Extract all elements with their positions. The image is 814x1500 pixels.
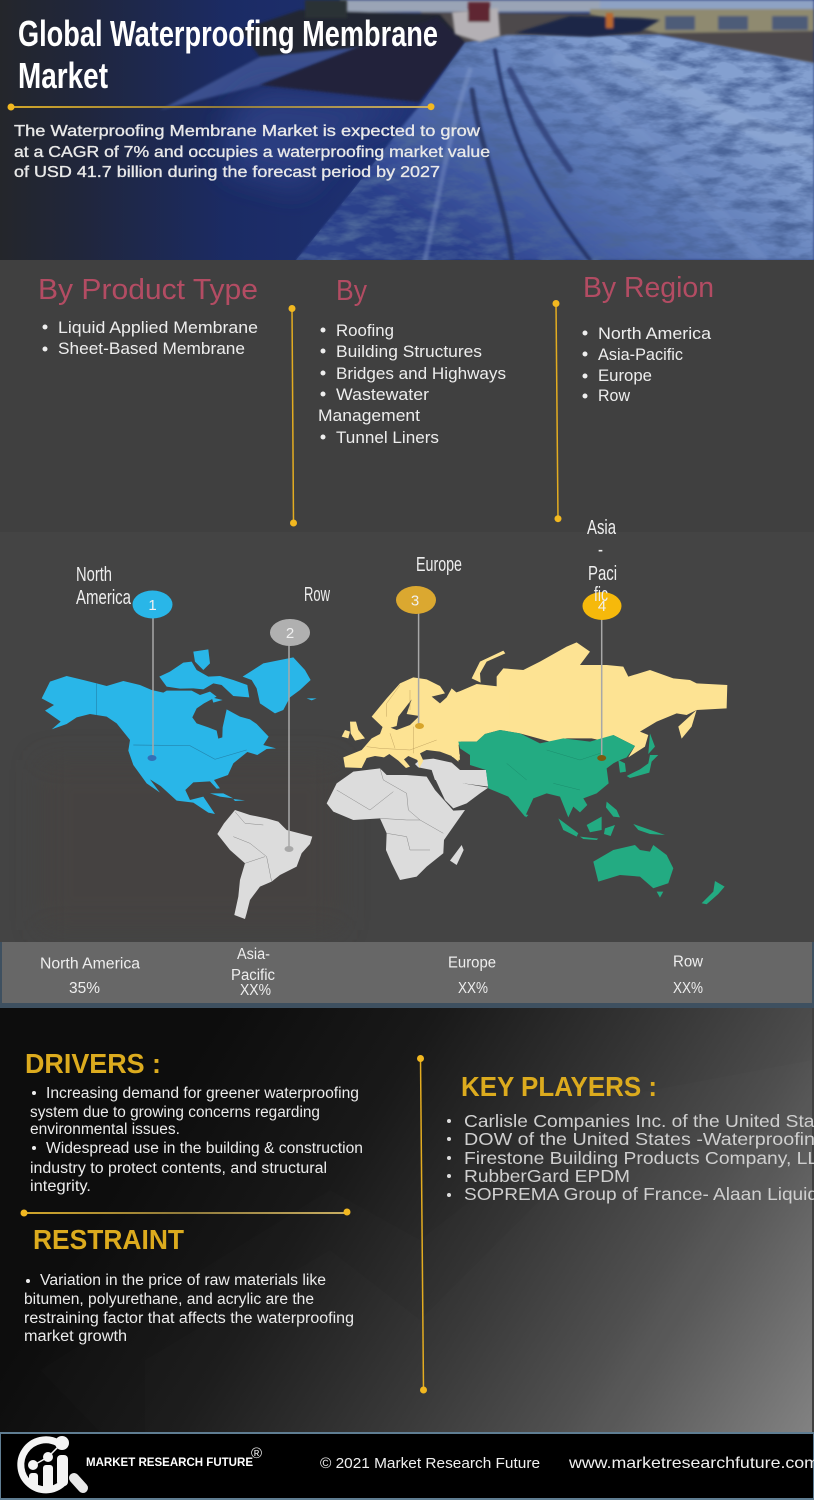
- list: applications: [318, 322, 506, 447]
- heading: key players: KEY PLAYERS :: [461, 1071, 657, 1102]
- title divider: [8, 103, 434, 110]
- heading: drivers: DRIVERS :: [25, 1048, 161, 1079]
- text: drivers list: Increasing demand for greener waterproofing: [46, 1085, 359, 1102]
- panel: footer: [0, 1432, 814, 1500]
- map: us border: [97, 683, 247, 759]
- list: applications: Building Structures: [336, 343, 482, 361]
- text: brand name: [86, 1445, 262, 1469]
- map: north america: [42, 649, 317, 814]
- heading: by region: By Region: [583, 272, 714, 304]
- text: restraint: Variation in the price of raw materials like: [40, 1272, 326, 1289]
- divider: drivers and restraint: [20, 1208, 350, 1216]
- photo: sky and building: [240, 0, 814, 65]
- intro text: [14, 123, 490, 181]
- pin 2: row: 2: [286, 625, 294, 642]
- photo: membrane sheet: [296, 35, 814, 260]
- list: regions: Asia-Pacific: [598, 346, 683, 364]
- text: restraint: [24, 1272, 354, 1345]
- text: brand name: MARKET RESEARCH FUTURE: [86, 1457, 253, 1469]
- map: europe: [342, 677, 510, 768]
- map label: north america: America: [76, 587, 132, 609]
- map: novaya zemlya and kamchatka: [472, 651, 697, 739]
- list: applications: Tunnel Liners: [336, 429, 439, 447]
- map: arctic islands: [159, 649, 249, 703]
- title: [18, 13, 438, 96]
- title: Global Waterproofing Membrane: [18, 13, 438, 54]
- list: key players: [447, 1111, 814, 1204]
- pin 4: asia-pacific: [582, 592, 622, 761]
- map label: asia-pacific: fic: [594, 584, 608, 606]
- map label: asia-pacific: Asia: [587, 517, 617, 539]
- text: copyright: © 2021 Market Research Future: [320, 1455, 540, 1472]
- text: website: www.marketresearchfuture.com: [568, 1455, 814, 1472]
- map label: row: Row: [304, 584, 330, 606]
- pin 3: europe: [396, 586, 436, 729]
- map label: asia-pacific: Paci: [588, 563, 617, 585]
- photo: membrane wrinkles: [425, 50, 814, 260]
- text: drivers list: integrity.: [30, 1178, 91, 1195]
- list: regions: Row: [598, 387, 630, 405]
- share: europe: Europe: [448, 954, 496, 972]
- heading: by product type: By Product Type: [38, 274, 258, 306]
- photo: workers: [305, 0, 660, 42]
- share: asia-pacific: [231, 946, 275, 999]
- text: brand name: ®: [251, 1445, 262, 1462]
- list: key players: DOW of the United States -Waterproofing: [464, 1129, 814, 1149]
- list: product types: Liquid Applied Membrane: [58, 319, 258, 337]
- share: europe: XX%: [458, 980, 488, 997]
- heading: by application: By: [336, 275, 367, 307]
- list: regions: Europe: [598, 367, 652, 385]
- list: key players: RubberGard EPDM: [464, 1166, 630, 1186]
- text: restraint: market growth: [24, 1328, 127, 1345]
- text: drivers list: Widespread use in the building & construction: [46, 1140, 363, 1157]
- panel: drivers, restraint and key players: [0, 1008, 812, 1432]
- photo: membrane texture: [280, 30, 814, 260]
- share: row: Row: [673, 954, 704, 970]
- share: north america: North America: [40, 956, 140, 972]
- map label: europe: Europe: [416, 554, 462, 576]
- share: north america: 35%: [69, 980, 100, 997]
- heading: restraint: RESTRAINT: [33, 1224, 184, 1255]
- map label: asia-pacific: [587, 517, 617, 606]
- divider: column 1: [288, 305, 297, 526]
- pin 1: north america: 1: [148, 597, 157, 614]
- map: russia: [452, 642, 727, 760]
- text: restraint: restraining factor that affects the waterproofing: [24, 1310, 354, 1327]
- map: asia pacific: [458, 730, 725, 904]
- list: key players: Firestone Building Products Company, LLC: [464, 1148, 814, 1168]
- list: applications: Roofing: [336, 322, 394, 340]
- map: australia and new zealand: [593, 845, 725, 904]
- list: key players: SOPREMA Group of France- Alaan Liquid: [464, 1184, 814, 1204]
- divider: column 2: [552, 300, 562, 522]
- share: asia-pacific: Asia-: [237, 946, 270, 963]
- pin 4: asia-pacific: 4: [598, 598, 606, 615]
- share: asia-pacific: Pacific: [231, 967, 275, 984]
- text: drivers list: system due to growing concerns regarding: [30, 1104, 320, 1121]
- map: east asia islands: [524, 733, 658, 817]
- map label: asia-pacific: -: [598, 539, 603, 561]
- list: product types: Sheet-Based Membrane: [58, 340, 245, 358]
- list: regions: [582, 325, 712, 405]
- panel: hero photo banner: [0, 0, 814, 260]
- text: drivers list: industry to protect contents, and structural: [30, 1160, 327, 1177]
- intro text: at a CAGR of 7% and occupies a waterproofing market value: [14, 144, 490, 161]
- list: applications: Bridges and Highways: [336, 365, 506, 383]
- pin 3: europe: 3: [411, 592, 419, 610]
- list: regions: North America: [598, 325, 712, 343]
- map label: north america: [76, 564, 132, 609]
- text: drivers list: environmental issues.: [30, 1121, 180, 1138]
- divider: key players column: [417, 1055, 427, 1394]
- map: africa and middle east: [327, 759, 488, 880]
- pin 2: row: [270, 619, 310, 852]
- map: british isles: [342, 722, 365, 741]
- map: southeast asia islands: [558, 817, 665, 840]
- list: key players: Carlisle Companies Inc. of the United States: [464, 1111, 814, 1131]
- map: iceland and caribbean: [210, 698, 317, 801]
- share: europe: [448, 954, 496, 997]
- map label: north america: North: [76, 564, 112, 586]
- intro text: of USD 41.7 billion during the forecast period by 2027: [14, 164, 440, 181]
- share: row: [673, 954, 704, 997]
- list: applications: Wastewater: [336, 386, 430, 404]
- text: restraint: bitumen, polyurethane, and acrylic are the: [24, 1291, 314, 1308]
- list: applications: Management: [318, 407, 420, 425]
- map: greenland: [243, 657, 311, 713]
- panel: world map: [0, 532, 814, 943]
- intro text: The Waterproofing Membrane Market is expected to grow: [14, 123, 480, 140]
- share: row: XX%: [673, 980, 703, 997]
- photo: light strips on roof: [160, 47, 362, 110]
- title: Market: [18, 55, 108, 96]
- list: product types: [42, 319, 258, 358]
- photo: dark patch on roof: [260, 17, 465, 102]
- panel: segmentation: [0, 260, 814, 532]
- share: asia-pacific: XX%: [240, 982, 271, 999]
- pin 1: north america: [132, 590, 172, 761]
- panel: market share table: [0, 942, 814, 1008]
- map: south america: [217, 810, 312, 919]
- share: north america: [40, 956, 140, 997]
- icon: market research future logo: [21, 1436, 83, 1492]
- text: drivers list: [30, 1085, 363, 1195]
